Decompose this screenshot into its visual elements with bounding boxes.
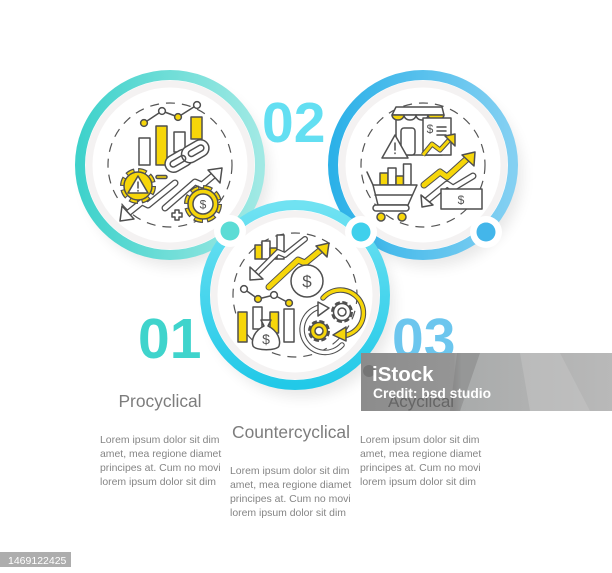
text block: Countercyclical: lorem ipsum dolor sit dim (230, 508, 346, 519)
image id tag (0, 552, 71, 567)
text block: Procyclical: Lorem ipsum dolor sit dim (100, 435, 220, 446)
icon: countercyclical: $ (302, 272, 312, 291)
icon: countercyclical (233, 233, 363, 357)
text block: Procyclical: amet, mea regione diamet (100, 449, 221, 460)
text block: Acyclical: Lorem ipsum dolor sit dim (360, 435, 480, 446)
heading: Countercyclical: Countercyclical (232, 422, 350, 442)
circle: countercyclical ring (205, 205, 394, 397)
watermark band: iStock (372, 363, 434, 386)
number 03: 03 (392, 307, 455, 371)
circle: procyclical ring (80, 75, 269, 267)
text block: Countercyclical: amet, mea regione diamet (230, 480, 351, 491)
text block: Countercyclical: principes at. Cum no movi (230, 494, 351, 505)
text block: Procyclical: principes at. Cum no movi (100, 463, 221, 474)
icon: countercyclical: $ (262, 331, 270, 347)
icon: acyclical: $ (458, 193, 465, 207)
heading: Procyclical: Procyclical (118, 391, 202, 411)
text block: Acyclical: amet, mea regione diamet (360, 449, 481, 460)
number 02: 02 (262, 91, 325, 155)
watermark band: Acyclical (388, 392, 454, 411)
text block: Acyclical: principes at. Cum no movi (360, 463, 481, 474)
icon: procyclical: $ (200, 198, 207, 212)
node: cyan (345, 216, 377, 248)
text block: Countercyclical: Lorem ipsum dolor sit dim (230, 466, 350, 477)
node: teal (214, 215, 246, 247)
watermark band (361, 353, 612, 411)
text block: Acyclical: lorem ipsum dolor sit dim (360, 477, 476, 488)
watermark band: Credit: bsd studio (373, 386, 491, 401)
icon: acyclical: $ (427, 122, 434, 136)
node: blue (470, 216, 502, 248)
text block: Procyclical: lorem ipsum dolor sit dim (100, 477, 216, 488)
image id tag: 1469122425 (8, 555, 67, 567)
number 01: 01 (138, 307, 201, 371)
icon: procyclical (108, 102, 232, 227)
circle: acyclical ring (333, 75, 522, 267)
icon: acyclical (361, 103, 485, 227)
